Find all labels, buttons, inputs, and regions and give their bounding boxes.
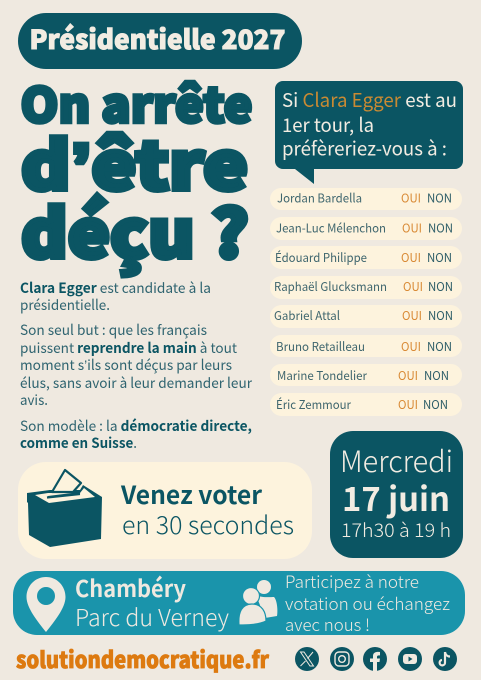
icon: people xyxy=(239,580,277,625)
icon: ballot box xyxy=(27,470,102,547)
social icons xyxy=(295,647,457,671)
panel: location banner xyxy=(13,568,465,636)
row: Édouard Philippe: OUI xyxy=(401,248,421,266)
poll list: candidates xyxy=(270,188,462,416)
row: Éric Zemmour: Éric Zemmour xyxy=(276,395,351,413)
text block: candidate description: Son modèle : la démocratie directe, xyxy=(20,416,252,436)
text block: candidate description: Clara Egger est candidate à la xyxy=(20,278,211,298)
row: Jordan Bardella: NON xyxy=(427,188,452,206)
text: venez voter: en 30 secondes xyxy=(122,507,294,542)
row: Bruno Retailleau: NON xyxy=(427,337,452,355)
row: Bruno Retailleau: Bruno Retailleau xyxy=(276,337,365,355)
row: Éric Zemmour xyxy=(270,393,462,416)
row: Marine Tondelier: Marine Tondelier xyxy=(277,366,367,384)
row: Marine Tondelier: NON xyxy=(424,366,449,384)
row: Jean-Luc Mélenchon: OUI xyxy=(402,218,422,236)
speech bubble: question: 1er tour, la xyxy=(282,111,374,138)
row: Jean-Luc Mélenchon xyxy=(270,217,462,240)
panel: date: 17h30 à 19 h xyxy=(341,516,451,543)
title: On arrête d'être déçu ?: d’être xyxy=(21,114,248,210)
row: Raphaël Glucksmann: Raphaël Glucksmann xyxy=(274,277,387,295)
text: venez voter: Venez voter xyxy=(120,476,262,512)
row: Gabriel Attal: NON xyxy=(428,306,453,324)
row: Jordan Bardella xyxy=(270,188,462,210)
badge: Présidentielle 2027 xyxy=(18,13,302,69)
icon: Facebook xyxy=(363,647,387,671)
text block: candidate description: comme en Suisse. xyxy=(20,433,137,453)
text block: candidate description: Son seul but : que les français xyxy=(20,320,207,340)
speech bubble: question: Si Clara Egger est au xyxy=(282,86,457,113)
text: website: solutiondemocratique.fr xyxy=(16,643,270,675)
row: Gabriel Attal xyxy=(270,305,462,328)
title: On arrête d'être déçu ?: déçu ? xyxy=(21,182,249,278)
text block: candidate description xyxy=(20,278,253,453)
row: Marine Tondelier xyxy=(270,364,462,386)
row: Marine Tondelier: OUI xyxy=(398,366,418,384)
text: participez: votation ou échangez xyxy=(285,590,450,615)
icon: Instagram xyxy=(330,647,354,671)
text: participez xyxy=(285,568,450,636)
title: On arrête d'être déçu ?: On arrête xyxy=(20,66,252,136)
icon: map pin xyxy=(26,577,66,632)
panel: date xyxy=(330,431,463,558)
panel: vote call to action xyxy=(18,462,312,559)
icon: X xyxy=(295,647,319,671)
panel: date: Mercredi xyxy=(340,439,453,481)
text block: candidate description: puissent reprendre la main à tout xyxy=(20,338,238,358)
text: venez voter xyxy=(120,476,294,542)
text block: candidate description: moment s’ils sont déçus par leurs xyxy=(20,355,232,375)
row: Raphaël Glucksmann xyxy=(270,276,462,299)
row: Éric Zemmour: NON xyxy=(423,395,448,413)
speech bubble: question: préfèreriez-vous à : xyxy=(282,134,447,162)
row: Raphaël Glucksmann: NON xyxy=(428,277,453,295)
row: Gabriel Attal: Gabriel Attal xyxy=(274,306,340,324)
text block: candidate description: présidentielle. xyxy=(20,295,110,315)
text: Chambéry, Parc du Verney: Parc du Verney xyxy=(75,599,229,633)
row: Gabriel Attal: OUI xyxy=(402,306,422,324)
text: participez: avec nous ! xyxy=(285,611,370,636)
row: Raphaël Glucksmann: OUI xyxy=(403,277,423,295)
row: Bruno Retailleau: OUI xyxy=(401,337,421,355)
row: Jordan Bardella: Jordan Bardella xyxy=(277,188,362,206)
row: Éric Zemmour: OUI xyxy=(398,395,418,413)
text block: candidate description: avis. xyxy=(20,390,48,410)
row: Édouard Philippe: Édouard Philippe xyxy=(275,248,367,266)
panel: date: 17 juin xyxy=(342,473,450,521)
row: Édouard Philippe: NON xyxy=(427,248,452,266)
row: Jean-Luc Mélenchon: Jean-Luc Mélenchon xyxy=(276,218,386,236)
title: On arrête d'être déçu ? xyxy=(20,66,252,278)
badge: Présidentielle 2027: Présidentielle 2027 xyxy=(30,18,286,57)
text: Chambéry, Parc du Verney: Chambéry xyxy=(75,570,186,604)
row: Bruno Retailleau xyxy=(270,335,462,357)
row: Jordan Bardella: OUI xyxy=(401,188,421,206)
row: Jean-Luc Mélenchon: NON xyxy=(428,218,453,236)
icon: YouTube xyxy=(398,647,422,671)
row: Édouard Philippe xyxy=(270,246,462,269)
text: Chambéry, Parc du Verney xyxy=(75,570,229,633)
text block: candidate description: élus, sans avoir à leur demander leur xyxy=(20,373,253,393)
icon: TikTok xyxy=(433,647,457,671)
text: participez: Participez à notre xyxy=(285,568,419,593)
speech bubble: question xyxy=(275,81,463,184)
